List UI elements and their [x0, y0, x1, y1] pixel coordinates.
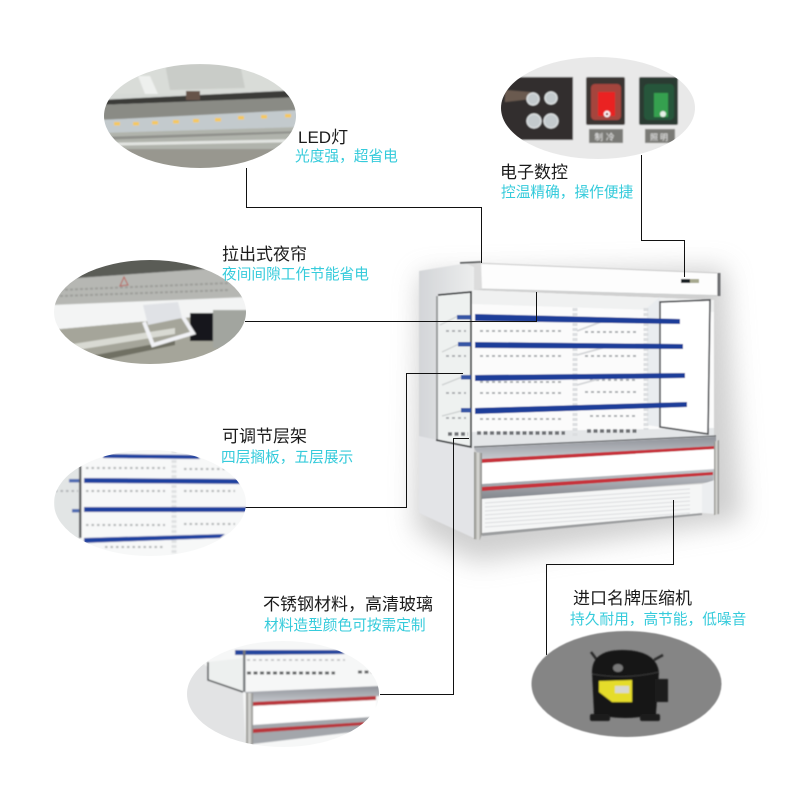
main product: open display refrigerator — [415, 262, 742, 562]
caption: stainless steel and glass: 材料造型颜色可按需定制 — [264, 617, 426, 634]
lower deck — [474, 437, 716, 460]
lower louvre panel — [482, 484, 702, 534]
caption: adjustable shelves: 四层搁板，五层展示 — [221, 448, 353, 466]
shelf uprights and brackets — [575, 308, 646, 436]
leader line: shelves — [245, 374, 463, 508]
photo: stainless steel and glass — [184, 638, 384, 750]
leader line: stainless steel and glass — [380, 438, 469, 694]
leader line: night curtain — [245, 292, 536, 322]
interior perforation rows — [446, 331, 637, 419]
canopy — [474, 263, 717, 295]
photo: LED light — [104, 64, 296, 168]
caption: compressor: 持久耐用，高节能，低噪音 — [570, 611, 746, 628]
interior back wall — [472, 290, 714, 448]
caption: electronic control: 控温精确，操作便捷 — [501, 184, 634, 201]
canopy control strip — [681, 279, 699, 283]
leader line: electronic control — [642, 155, 684, 277]
heading: pull-out curtain: 拉出式夜帘 — [222, 245, 307, 264]
heading: stainless steel and glass: 不锈钢材料，高清玻璃 — [263, 595, 433, 614]
heading: adjustable shelves: 可调节层架 — [222, 427, 307, 446]
photo: adjustable shelves — [54, 452, 246, 554]
cabinet left side panel — [419, 262, 474, 538]
photo: electronic control panel: 制冷 — [594, 132, 618, 142]
leader line: LED — [246, 168, 482, 263]
heading: electronic control: 电子数控 — [500, 163, 568, 182]
left glass end panel — [436, 292, 471, 447]
photo: compressor — [532, 631, 722, 737]
heading: LED: LED灯 — [298, 128, 348, 147]
right end area — [647, 297, 660, 427]
leader line: compressor — [546, 500, 674, 655]
photo: pull-out night curtain — [54, 260, 246, 364]
photo: electronic control panel: 照明 — [650, 133, 670, 142]
heading: compressor: 进口名牌压缩机 — [573, 589, 692, 608]
LED beads — [114, 114, 291, 126]
stainless uprights — [474, 452, 482, 540]
shelves — [457, 314, 687, 414]
caption: LED: 光度强，超省电 — [295, 148, 398, 165]
right glass end panel — [660, 300, 710, 434]
photo: electronic control panel — [501, 57, 695, 159]
caption: pull-out curtain: 夜间间隙工作节能省电 — [222, 266, 369, 283]
